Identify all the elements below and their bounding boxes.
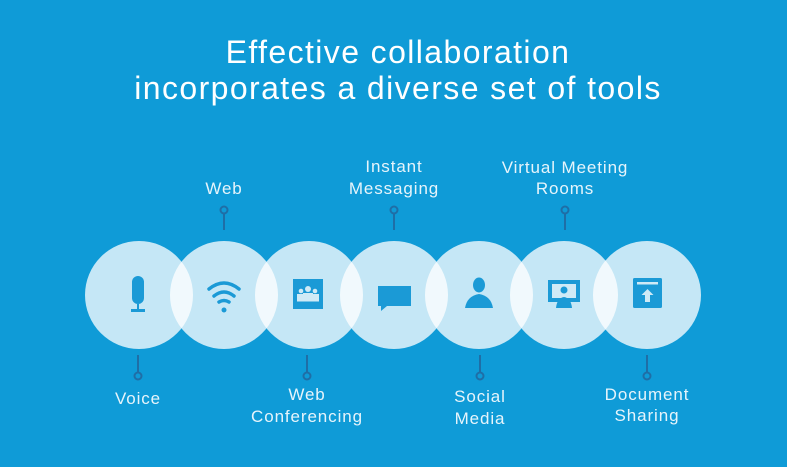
labels: Rooms (536, 179, 594, 198)
labels (115, 157, 689, 428)
icon: person (465, 278, 493, 308)
labels: Sharing (615, 406, 679, 425)
icon: chat bubble (378, 286, 411, 311)
title: incorporates a diverse set of tools (134, 70, 662, 106)
labels: Social (454, 387, 506, 406)
labels: Web (288, 385, 326, 404)
labels: Voice (115, 389, 161, 408)
icon: document sharing (633, 278, 662, 308)
labels: Web (205, 179, 243, 198)
icon: wifi (209, 283, 239, 302)
labels: Instant (365, 157, 423, 176)
title (134, 34, 662, 106)
icon: virtual meeting monitor (548, 280, 580, 308)
labels: Media (455, 409, 505, 428)
circles row (85, 241, 701, 349)
labels: Messaging (349, 179, 439, 198)
connectors (134, 206, 650, 380)
labels: Virtual Meeting (502, 158, 628, 177)
title: Effective collaboration (226, 34, 570, 70)
labels: Document (605, 385, 689, 404)
icon: microphone (131, 276, 145, 312)
icon: web conferencing (293, 279, 323, 309)
labels: Conferencing (251, 407, 363, 426)
